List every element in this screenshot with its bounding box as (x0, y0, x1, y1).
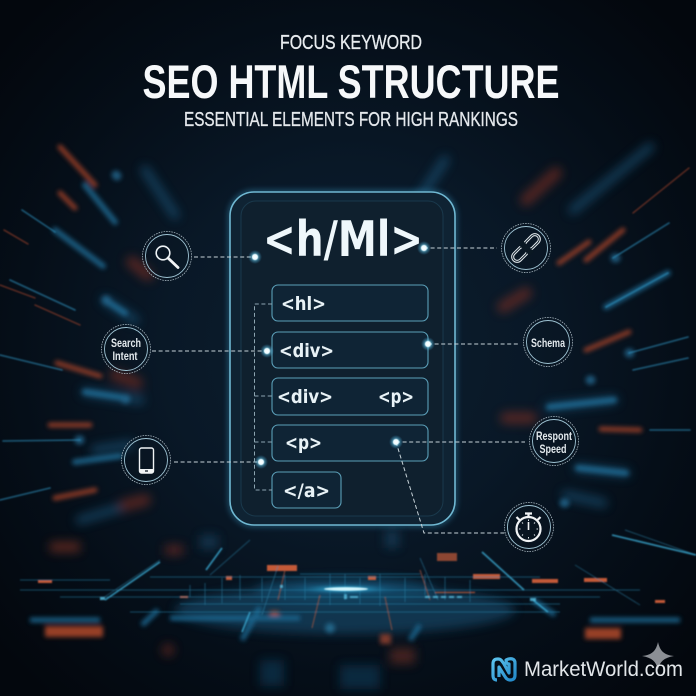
row: div (272, 332, 428, 368)
panel: html structure (230, 192, 455, 525)
row: closing a (272, 472, 341, 508)
icon: chain link (502, 224, 550, 272)
icon: search (142, 232, 192, 280)
row: p (272, 425, 428, 461)
badge: search intent (102, 324, 150, 374)
logo mark (493, 659, 515, 680)
badge: response speed (530, 416, 578, 466)
row: div and p (272, 378, 428, 415)
title (142, 32, 560, 131)
row: h1: <hl> (281, 293, 326, 315)
watermark star (642, 642, 674, 670)
row: div and p: <p> (378, 386, 414, 408)
row: div and p: <div> (277, 386, 333, 408)
title: subtitle: ESSENTIAL ELEMENTS FOR HIGH RANKINGS (184, 109, 518, 131)
row: h1 (272, 285, 428, 321)
badge: search intent: Intent (112, 349, 138, 363)
badge: schema: Schema (531, 336, 565, 350)
title: focus keyword: FOCUS KEYWORD (280, 32, 422, 54)
row: div: <div> (279, 340, 334, 362)
bottom circuit floor (20, 530, 696, 689)
heading tag: <h/Ml> (263, 211, 423, 268)
logo text: MarketWorld.com (524, 657, 683, 681)
icon: stopwatch (504, 502, 554, 552)
badge: response speed: Respont (536, 429, 572, 443)
icon: mobile phone (122, 436, 170, 484)
row: closing a: </a> (283, 480, 330, 502)
logo: marketworld (493, 642, 683, 681)
row: p: <p> (285, 432, 322, 454)
connector lines (152, 248, 525, 533)
title: main heading: SEO HTML STRUCTURE (142, 55, 560, 108)
connector dots (248, 241, 435, 469)
badge: schema (524, 318, 572, 366)
badge: search intent: Search (111, 336, 141, 350)
badge: response speed: Speed (540, 442, 566, 456)
